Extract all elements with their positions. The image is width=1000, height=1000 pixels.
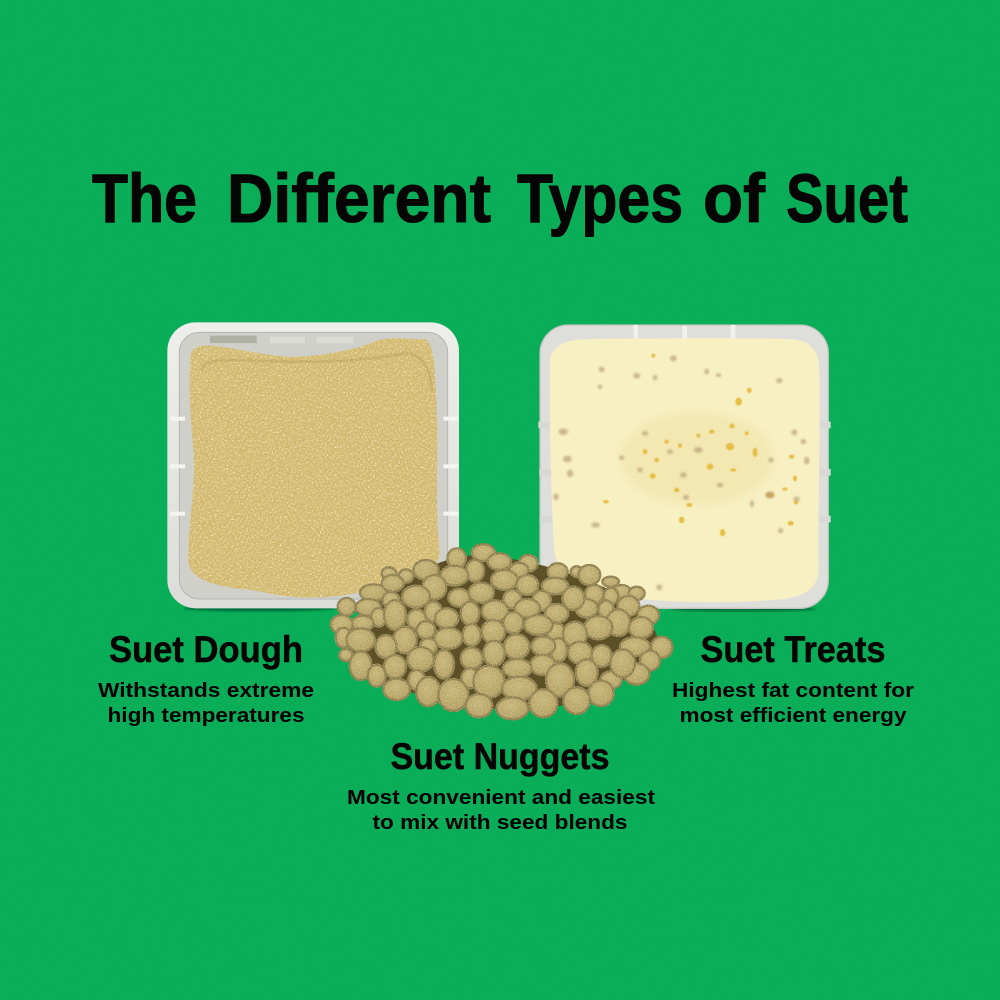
darker speckle cluster [620,412,773,505]
label: suet dough [98,629,314,727]
tray outer [540,325,828,608]
title: Different [227,160,491,237]
tray outer rim [167,322,459,608]
dough block [188,338,440,598]
label: suet dough: high temperatures [108,705,304,727]
seed flecks [603,354,798,536]
label: suet dough: Withstands extreme [98,680,314,702]
cream suet block [550,338,820,602]
label: suet treats: Highest fat content for [672,680,914,702]
heading: suet nuggets: Suet Nuggets [390,736,610,777]
label: suet nuggets [347,736,655,834]
title: of [703,160,766,237]
pile: suet nuggets [331,544,672,719]
label: suet nuggets: to mix with seed blends [372,812,628,834]
heading: suet treats: Suet Treats [700,629,886,670]
title: Suet [786,160,908,237]
label: suet treats [672,629,914,727]
panel: suet treats tray [538,325,831,612]
title [92,160,908,237]
label: suet treats: most efficient energy [680,705,907,727]
panel: suet dough tray [167,322,459,612]
title: Types [517,160,683,237]
heading: suet dough: Suet Dough [109,629,303,670]
label: suet nuggets: Most convenient and easiest [347,787,655,809]
title: The [92,160,197,237]
tray inner wall [179,332,448,599]
